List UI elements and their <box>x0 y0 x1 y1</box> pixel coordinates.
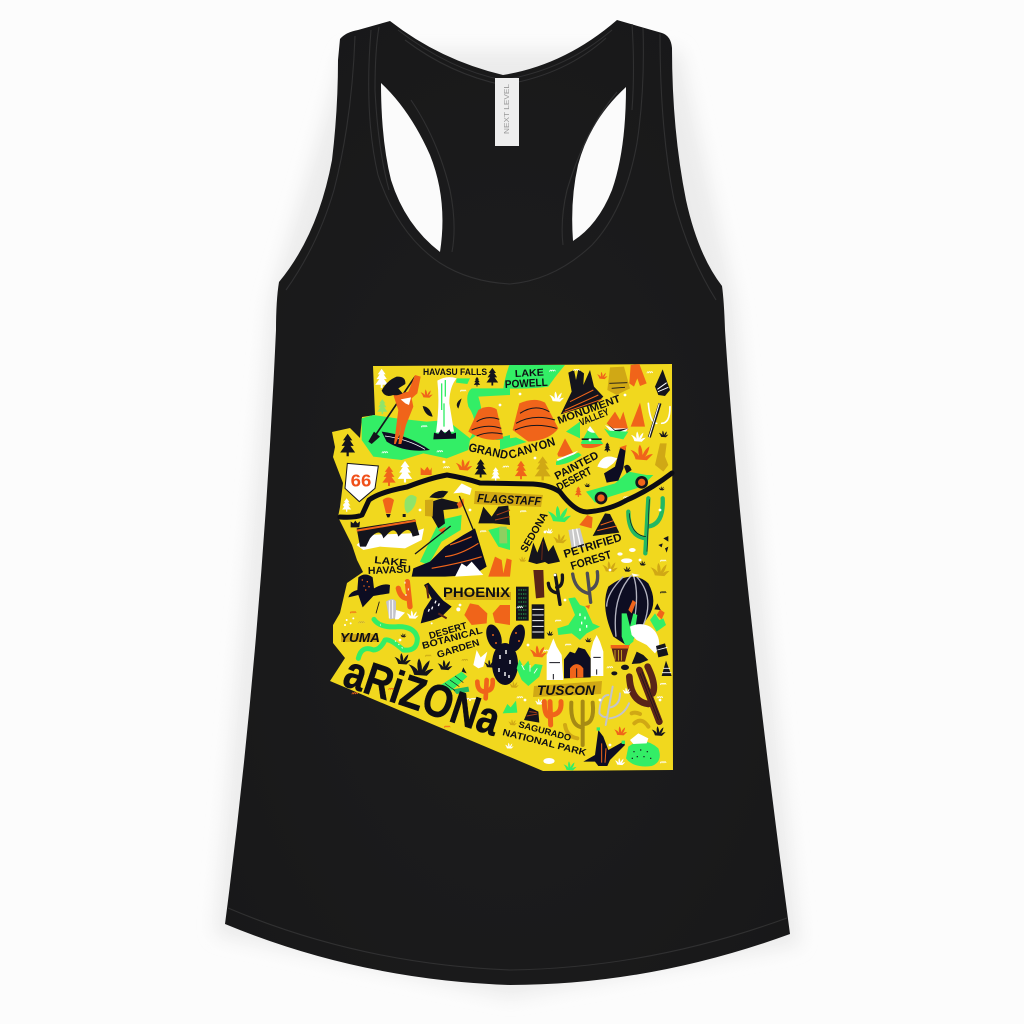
green rock, brown rock <box>503 701 539 723</box>
yellow ground over river <box>478 395 510 438</box>
hiker <box>415 491 473 565</box>
label: Lake Havasu <box>368 555 411 577</box>
white dots <box>344 607 471 701</box>
neck label: NEXT LEVEL <box>504 84 511 134</box>
label: Lake Powell: POWELL <box>505 377 548 391</box>
crown icon <box>351 521 360 527</box>
doodles <box>359 622 476 700</box>
label: Flagstaff: FLAGSTAFF <box>477 491 542 508</box>
paddle <box>368 377 415 444</box>
woman <box>393 375 421 444</box>
orange and dark rocks <box>579 513 619 536</box>
white goat <box>630 624 659 653</box>
label: Monument Valley: MONUMENT <box>556 393 623 427</box>
label: Tuscon: TUSCON <box>537 683 595 698</box>
grey petrified logs <box>568 528 585 548</box>
bridge <box>357 519 419 547</box>
north-east illustrations: canyon, monument valley, jeep, cactus <box>500 364 670 576</box>
label: Havasu Falls: HAVASU FALLS <box>423 367 487 378</box>
route 66 sign <box>345 463 378 502</box>
ochre doodles <box>359 622 468 661</box>
hot air balloon <box>605 573 653 647</box>
label: Grand Canyon <box>467 434 557 462</box>
label: Yuma: YUMA <box>340 630 380 645</box>
botanical white and orange <box>473 650 493 698</box>
white flecks scattered on map <box>343 393 661 746</box>
label: Lake Havasu: HAVASU <box>368 565 411 577</box>
black cactus top <box>548 575 562 604</box>
label: Phoenix: PHOENIX <box>443 584 511 600</box>
state outline <box>330 364 673 771</box>
snake <box>358 602 417 658</box>
label: Sagurado National Park <box>501 719 588 759</box>
dark doodle <box>660 592 666 593</box>
ochre and orange rocks top <box>597 364 670 396</box>
jeep <box>586 445 653 504</box>
orange crown and tuft <box>421 459 472 475</box>
sedona green <box>488 527 510 550</box>
label: Desert Botanical Garden: GARDEN <box>436 637 481 661</box>
cactus lines <box>629 499 649 552</box>
label: Painted Desert: PAINTED <box>553 449 601 483</box>
doodles <box>517 607 666 763</box>
panel: Arizona map <box>330 364 673 771</box>
road balloons <box>383 495 417 517</box>
orange mesas phoenix <box>464 603 510 625</box>
rock stripes <box>657 647 671 673</box>
green barrel cactus <box>441 667 469 694</box>
orange cactus <box>398 582 410 607</box>
green aloe <box>517 659 543 686</box>
orange tuft <box>530 645 547 657</box>
dark heart cactus <box>348 574 390 607</box>
label: Grand Canyon: GRAND <box>467 440 510 462</box>
dark pear south <box>583 727 625 766</box>
route 66 sign: 66 <box>351 471 372 491</box>
tank top garment <box>225 20 790 985</box>
orange mesa <box>488 557 512 577</box>
neck and armhole trim seams <box>228 24 787 970</box>
grand canyon rock east <box>500 400 558 450</box>
south-west illustrations: cacti, snake <box>344 574 510 727</box>
sedona rocks <box>528 537 560 564</box>
label: Lake Powell: LAKE <box>515 367 544 380</box>
title: Arizona: aRiZONa <box>338 645 507 746</box>
label: Petrified Forest: FOREST <box>569 549 613 573</box>
ochre saguaro south <box>571 702 593 745</box>
goat cactus <box>650 603 666 632</box>
pines along the road <box>342 461 500 512</box>
garment shadow <box>215 50 800 998</box>
mountain <box>412 528 487 577</box>
mission church <box>547 635 603 680</box>
white blobs <box>617 548 636 563</box>
grand canyon rock west <box>468 407 503 440</box>
label: Painted Desert: DESERT <box>555 465 594 494</box>
black pines <box>340 368 498 478</box>
orange doodles <box>350 612 450 727</box>
large prickly pear cactus <box>483 622 528 685</box>
lake powell water <box>503 365 565 389</box>
label: Sedona: SEDONA <box>518 510 551 554</box>
label: Grand Canyon: CANYON <box>507 434 557 462</box>
orange and ochre plants <box>549 392 668 472</box>
label: Desert Botanical Garden <box>421 621 484 661</box>
green prickly cactus <box>557 597 600 640</box>
small black icons <box>584 483 668 572</box>
painted hills <box>556 403 645 465</box>
ochre pine, orange pine <box>515 443 611 497</box>
white pine <box>375 369 388 388</box>
route 66 road <box>340 473 672 517</box>
white pebble <box>543 758 555 764</box>
ochre curves <box>565 713 648 738</box>
grey cactus top <box>573 572 598 602</box>
basket <box>611 645 629 662</box>
white-grey saguaro <box>599 687 629 725</box>
flagstaff rocks <box>478 506 510 525</box>
drops and tuft <box>421 389 462 417</box>
label: Monument Valley: VALLEY <box>578 407 611 429</box>
label: Petrified Forest: PETRIFIED <box>562 532 623 561</box>
paddle board <box>382 432 430 451</box>
green barrel <box>626 733 660 766</box>
label: Lake Havasu: LAKE <box>374 555 408 569</box>
green cactus in balloon <box>622 600 637 647</box>
orange cactus south <box>544 702 561 725</box>
green bank and river <box>362 388 510 460</box>
waterfall <box>436 377 457 433</box>
towers and cacti at top <box>516 570 544 639</box>
light pine <box>377 399 387 414</box>
monument valley butte <box>561 369 603 414</box>
flagstaff-side tuft <box>545 506 571 543</box>
tiny tufts <box>505 631 666 770</box>
label: Desert Botanical Garden: BOTANICAL <box>421 625 484 652</box>
north-west illustrations: lake, falls, paddle boarder <box>340 368 512 577</box>
south-east illustrations: towers, balloon, mission <box>503 570 672 770</box>
doodles <box>503 369 666 561</box>
black spiky plants <box>394 633 496 676</box>
label: Sagurado National Park: NATIONAL PARK <box>501 727 588 759</box>
ochre tufts <box>519 556 670 576</box>
phoenix dark cactus <box>421 583 452 623</box>
neck label <box>495 78 519 146</box>
label: Desert Botanical Garden: DESERT <box>428 621 468 642</box>
dark rocks <box>611 643 672 676</box>
bridge water <box>357 528 424 550</box>
big brown saguaro <box>629 667 661 722</box>
armhole backdrop <box>381 83 626 252</box>
label: Sagurado National Park: SAGURADO <box>517 719 572 743</box>
green saguaro <box>628 498 663 553</box>
doodles <box>382 390 486 543</box>
grey rock and white <box>386 599 419 619</box>
label: Lake Powell <box>505 367 548 391</box>
tall white cactus <box>648 403 670 437</box>
